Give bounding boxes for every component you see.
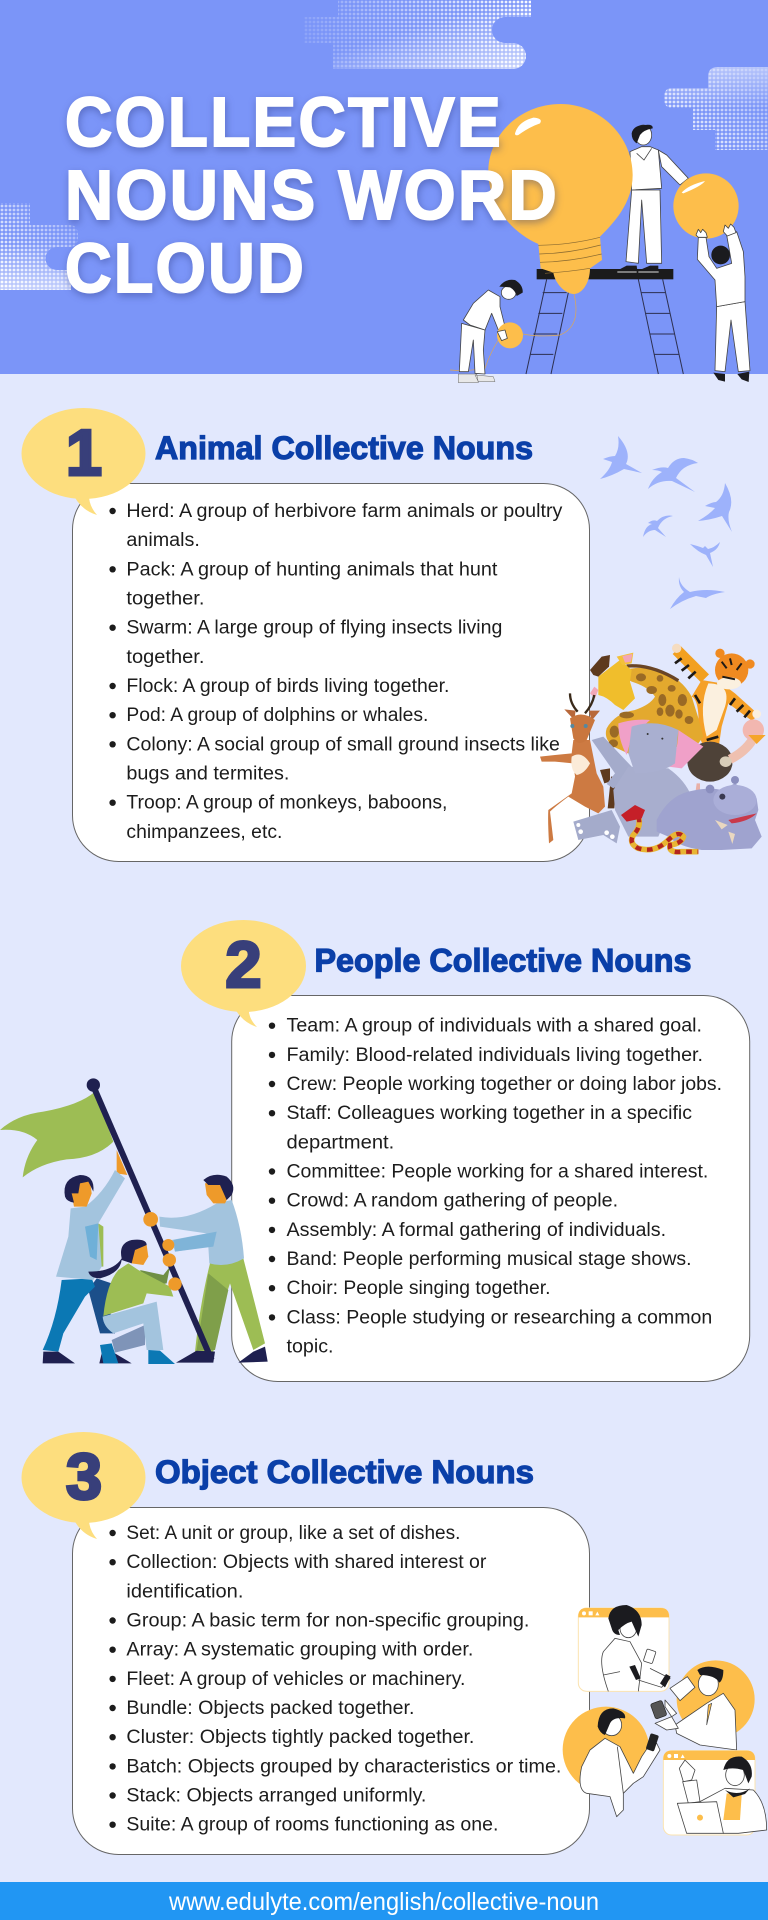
- list: people nouns: topic.: [286, 1336, 334, 1358]
- list: object nouns: Collection: Objects with shared interest or: [126, 1552, 487, 1573]
- window: woman with phone: [578, 1605, 671, 1691]
- list: animal nouns: Herd: A group of herbivore farm animals or poultry: [126, 501, 563, 522]
- card: [72, 1508, 590, 1854]
- cloud: right: [664, 67, 768, 150]
- list: people nouns: [269, 1016, 722, 1358]
- list: object nouns: Fleet: A group of vehicles or machinery.: [126, 1669, 465, 1690]
- small light bulb: [673, 173, 739, 239]
- list: people nouns: Assembly: A formal gathering of individuals.: [286, 1220, 666, 1241]
- heading: Object Collective Nouns: [155, 1454, 534, 1490]
- speech bubble with number 3: 3: [66, 1440, 102, 1513]
- list: object nouns: Cluster: Objects tightly packed together.: [126, 1727, 474, 1748]
- icon: flock of birds: [600, 436, 732, 609]
- title: CLOUD: [65, 229, 306, 307]
- heading: People Collective Nouns: [314, 942, 692, 978]
- list: animal nouns: Colony: A social group of small ground insects like: [126, 734, 560, 755]
- panel: animal collective nouns: [22, 408, 590, 862]
- list: people nouns: Team: A group of individuals with a shared goal.: [286, 1016, 702, 1037]
- list: animal nouns: chimpanzees, etc.: [126, 822, 282, 843]
- list: animal nouns: Pack: A group of hunting animals that hunt: [126, 559, 498, 580]
- person: left, reaching up: [43, 1150, 132, 1363]
- list: object nouns: [109, 1523, 561, 1836]
- list: people nouns: Crowd: A random gathering of people.: [286, 1191, 618, 1212]
- speech bubble with number 3: [22, 1432, 146, 1539]
- title: COLLECTIVE: [65, 83, 503, 161]
- list: object nouns: Array: A systematic grouping with order.: [126, 1640, 473, 1661]
- list: object nouns: Bundle: Objects packed together.: [126, 1698, 414, 1719]
- tiger: [672, 644, 761, 747]
- list: animal nouns: animals.: [126, 530, 200, 551]
- list: people nouns: Choir: People singing together.: [286, 1278, 550, 1299]
- ladders and platform: [526, 269, 683, 374]
- cloud: top: [304, 0, 531, 69]
- speech bubble with number 2: [181, 920, 306, 1027]
- panel: object collective nouns: [22, 1432, 590, 1854]
- list: people nouns: Staff: Colleagues working together in a specific: [286, 1103, 692, 1124]
- list: animal nouns: bugs and termites.: [126, 764, 289, 784]
- list: animal nouns: Pod: A group of dolphins or whales.: [126, 705, 428, 726]
- list: people nouns: Crew: People working together or doing labor jobs.: [286, 1074, 722, 1095]
- title: [65, 83, 559, 307]
- card: [232, 996, 750, 1382]
- illustration: group of cartoon animals: [540, 644, 766, 852]
- bent man with balloon: [450, 280, 576, 383]
- list: object nouns: Batch: Objects grouped by characteristics or time.: [126, 1756, 561, 1777]
- title: NOUNS WORD: [65, 156, 559, 234]
- list: animal nouns: Swarm: A large group of flying insects living: [126, 618, 502, 639]
- list: object nouns: identification.: [126, 1581, 243, 1602]
- list: people nouns: Family: Blood-related individuals living together.: [286, 1045, 703, 1066]
- hippo: [657, 776, 762, 850]
- speech bubble with number 1: [22, 408, 146, 515]
- man on platform: [617, 125, 688, 272]
- flag: [0, 1092, 113, 1177]
- speech bubble with number 2: 2: [225, 928, 262, 1001]
- man lifting bulb: [696, 224, 750, 382]
- list: object nouns: Set: A unit or group, like a set of dishes.: [126, 1523, 460, 1544]
- giraffe: [590, 653, 703, 808]
- list: people nouns: department.: [286, 1132, 394, 1153]
- footer url: www.edulyte.com/english/collective-noun: [168, 1888, 599, 1916]
- window: woman waving at laptop: [663, 1751, 767, 1835]
- circle: man in shirt: [563, 1707, 660, 1817]
- elephant: [573, 720, 703, 843]
- flag pole: [87, 1078, 212, 1360]
- list: object nouns: Group: A basic term for non-specific grouping.: [126, 1610, 529, 1632]
- circle: man with phone and envelope: [650, 1660, 755, 1750]
- illustration: people raising a flag: [0, 1078, 268, 1364]
- card: [72, 484, 590, 862]
- list: people nouns: Band: People performing musical stage shows.: [286, 1249, 692, 1270]
- list: animal nouns: [109, 501, 563, 843]
- person: kneeling: [88, 1240, 175, 1364]
- person: right, holding pole: [159, 1175, 268, 1363]
- hands on pole: [143, 1212, 182, 1291]
- snake: [621, 805, 698, 852]
- gazelle: [540, 693, 605, 843]
- list: object nouns: Suite: A group of rooms functioning as one.: [126, 1815, 498, 1836]
- list: animal nouns: together.: [126, 647, 204, 668]
- list: animal nouns: Flock: A group of birds living together.: [126, 676, 449, 697]
- speech bubble with number 1: 1: [66, 416, 102, 489]
- list: people nouns: Committee: People working for a shared interest.: [286, 1162, 708, 1182]
- heading: Animal Collective Nouns: [155, 430, 533, 466]
- list: animal nouns: Troop: A group of monkeys, baboons,: [126, 793, 447, 814]
- list: people nouns: Class: People studying or researching a common: [286, 1307, 712, 1328]
- footer bar: [0, 1882, 768, 1920]
- header band: [0, 0, 768, 374]
- list: object nouns: Stack: Objects arranged uniformly.: [126, 1786, 426, 1806]
- illustration: people with phones: [563, 1605, 767, 1835]
- illustration: lightbulb team: [450, 104, 750, 383]
- ostrich: [687, 719, 766, 791]
- big light bulb: [488, 104, 633, 294]
- panel: people collective nouns: [181, 920, 750, 1382]
- cloud: left: [0, 203, 78, 290]
- list: animal nouns: together.: [126, 588, 204, 610]
